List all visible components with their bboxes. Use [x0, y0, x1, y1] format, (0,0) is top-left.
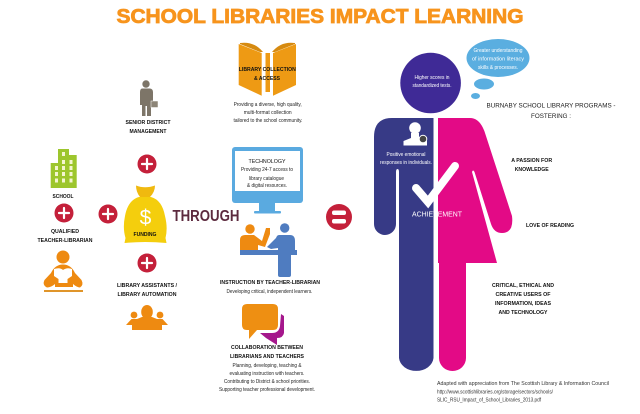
text: source credit: Adapted with appreciation from The Scottish Library & Information Council [437, 381, 609, 387]
text: critical ethical creative users: AND TECHNOLOGY [498, 310, 548, 316]
icon: person with badge [404, 122, 427, 146]
text: critical ethical creative users: CREATIVE USERS OF [496, 292, 551, 298]
label: senior district management: MANAGEMENT [130, 129, 167, 135]
text: critical ethical creative users: INFORMATION, IDEAS [495, 301, 551, 307]
text: collaboration between librarians and teachers: COLLABORATION BETWEEN [231, 345, 303, 351]
figure: achievement person [374, 53, 512, 371]
heading: burnaby school library programs: BURNABY SCHOOL LIBRARY PROGRAMS - [486, 102, 616, 110]
text: collaboration between librarians and teachers: Supporting teacher professional development. [219, 387, 315, 393]
text: library collection description: tailored to the school community. [234, 118, 303, 124]
text: love of reading: LOVE OF READING [526, 223, 575, 229]
text: collaboration between librarians and teachers: LIBRARIANS AND TEACHERS [230, 354, 304, 360]
icon: library collection book: LIBRARY COLLECTION [239, 67, 296, 73]
icon: technology monitor: Providing 24-7 access to [241, 167, 293, 173]
thought bubble: information literacy: skills & processes. [478, 65, 518, 71]
label: achievement: ACHIEVEMENT [412, 212, 463, 218]
thought bubble: information literacy: of information literacy [472, 56, 525, 62]
label: library assistants and automation [117, 283, 177, 298]
icon: technology monitor: TECHNOLOGY [248, 159, 286, 165]
text: source credit: SLIC_RSU_Impact_of_School_Libraries_2013.pdf [437, 398, 542, 404]
icon: technology monitor: library catalogue [249, 176, 284, 182]
text: positive emotional responses [380, 152, 432, 166]
label: school: SCHOOL [52, 194, 74, 200]
text: collaboration between librarians and teachers: Contributing to District & school priorities. [224, 379, 310, 385]
female half of body [438, 118, 512, 371]
text: instruction by teacher-librarian: Developing critical, independent learners. [226, 289, 313, 295]
icon: technology monitor [232, 147, 303, 214]
icon: funding money bag: $ [140, 206, 152, 230]
text: collaboration between librarians and teachers: Planning, developing, teaching & [232, 363, 302, 369]
text: critical ethical creative users [492, 283, 554, 316]
icon: teacher and student at desk [240, 223, 297, 277]
heading: through: THROUGH [172, 208, 240, 225]
icon: school building [51, 149, 77, 188]
head with test scores: Higher scores in [414, 75, 450, 81]
icon: check mark [416, 166, 455, 202]
text: source credit [437, 381, 609, 404]
text: positive emotional responses: responses in individuals. [380, 160, 432, 166]
text: a passion for knowledge: KNOWLEDGE [515, 167, 549, 173]
thought bubble: information literacy [466, 39, 530, 99]
heading: burnaby school library programs [486, 102, 616, 120]
icon: equals sign [326, 204, 352, 230]
label: senior district management [126, 120, 171, 135]
icon: plus above funding [138, 154, 156, 174]
text: a passion for knowledge [511, 158, 552, 173]
text: library collection description: Providing a diverse, high quality, [234, 102, 302, 108]
head with test scores: standardized tests. [412, 83, 452, 89]
icon: technology monitor: & digital resources. [247, 183, 287, 189]
text: positive emotional responses: Positive emotional [386, 152, 426, 158]
text: collaboration between librarians and teachers: evaluating instruction with teachers. [230, 371, 305, 377]
text: collaboration between librarians and teachers [219, 345, 315, 393]
icon: plus below school [54, 204, 74, 222]
male half of body [374, 118, 434, 371]
label: qualified teacher-librarian: QUALIFIED [51, 229, 79, 235]
text: critical ethical creative users: CRITICAL, ETHICAL AND [492, 283, 554, 289]
text: instruction by teacher-librarian: INSTRUCTION BY TEACHER-LIBRARIAN [220, 280, 320, 286]
text: instruction by teacher-librarian [220, 280, 320, 295]
label: qualified teacher-librarian [38, 229, 92, 244]
icon: library collection book [239, 43, 296, 96]
label: qualified teacher-librarian: TEACHER-LIBRARIAN [38, 238, 92, 244]
icon: funding money bag: FUNDING [134, 232, 157, 238]
thought bubble: information literacy: Greater understanding [474, 48, 523, 54]
label: library assistants and automation: LIBRARY AUTOMATION [118, 292, 176, 298]
icon: plus below funding [138, 254, 156, 272]
icon: senior district manager [140, 80, 158, 116]
icon: library collection book: & ACCESS [254, 76, 280, 82]
icon: group of assistants [126, 305, 168, 330]
label: library assistants and automation: LIBRARY ASSISTANTS / [117, 283, 177, 289]
head with test scores [400, 53, 461, 113]
icon: plus left of funding [98, 204, 118, 224]
icon: reading teacher-librarian [44, 250, 83, 292]
icon: funding money bag [124, 186, 167, 243]
title: SCHOOL LIBRARIES IMPACT LEARNING [116, 6, 524, 28]
text: library collection description [234, 102, 303, 124]
text: library collection description: multi-format collection [244, 110, 292, 116]
text: a passion for knowledge: A PASSION FOR [511, 158, 552, 164]
text: source credit: http://www.scottishlibraries.org/storage/sectors/schools/ [437, 390, 554, 396]
heading: burnaby school library programs: FOSTERING : [531, 113, 571, 120]
icon: collaboration speech bubbles [242, 304, 284, 345]
label: senior district management: SENIOR DISTRICT [126, 120, 171, 126]
